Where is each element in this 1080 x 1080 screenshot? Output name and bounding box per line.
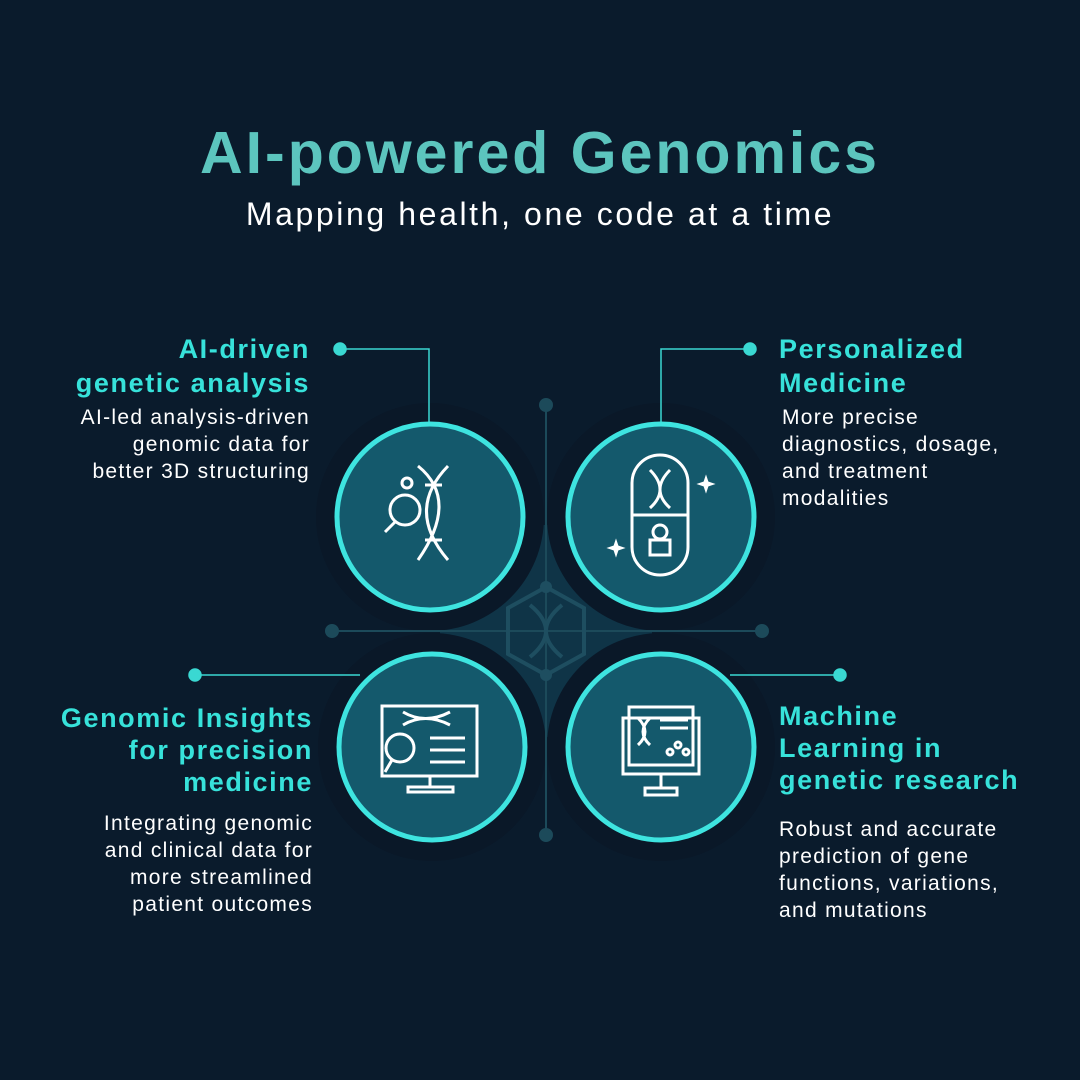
text: and mutations [779, 899, 928, 922]
heading: Learning in [779, 733, 942, 763]
icon: pill [608, 455, 714, 575]
icon: monitor ml [623, 707, 699, 795]
text: better 3D structuring [92, 460, 310, 483]
text: patient outcomes [132, 893, 313, 916]
heading: Medicine [779, 368, 907, 398]
center glow area [316, 403, 775, 861]
text [80, 406, 310, 483]
heading: Personalized [779, 334, 965, 364]
heading [779, 701, 1019, 795]
icon: dna magnifier [385, 466, 448, 560]
icon: center dna hexagon [508, 583, 584, 679]
heading: genetic analysis [76, 368, 310, 398]
heading: AI-driven [179, 334, 310, 364]
text: Integrating genomic [104, 812, 313, 835]
heading: Machine [779, 701, 898, 731]
text: More precise [782, 406, 919, 429]
title: AI-powered Genomics [200, 120, 880, 186]
panel: AI-driven genetic analysis [76, 334, 310, 483]
text: Robust and accurate [779, 818, 998, 841]
heading [76, 334, 310, 398]
text [782, 406, 999, 510]
heading [779, 334, 965, 398]
heading: Genomic Insights [61, 703, 313, 733]
heading [61, 703, 313, 797]
text [779, 818, 999, 922]
panel: Personalized Medicine [779, 334, 999, 510]
connectors [189, 343, 846, 681]
subtitle: Mapping health, one code at a time [246, 196, 834, 232]
text: AI-led analysis-driven [81, 406, 310, 429]
heading: genetic research [779, 765, 1019, 795]
text: prediction of gene [779, 845, 969, 868]
text: modalities [782, 487, 890, 510]
text: genomic data for [133, 433, 310, 456]
axis lines [326, 399, 768, 841]
circles [337, 424, 754, 840]
text: diagnostics, dosage, [782, 433, 999, 456]
panel: Machine Learning [779, 701, 1019, 922]
text: and treatment [782, 460, 928, 483]
panel: Genomic Insights [61, 703, 313, 916]
heading: for precision [129, 735, 313, 765]
text [104, 812, 313, 916]
text: functions, variations, [779, 872, 999, 895]
text: more streamlined [130, 866, 313, 889]
heading: medicine [183, 767, 313, 797]
text: and clinical data for [105, 839, 313, 862]
icon: monitor magnifier [382, 706, 477, 792]
